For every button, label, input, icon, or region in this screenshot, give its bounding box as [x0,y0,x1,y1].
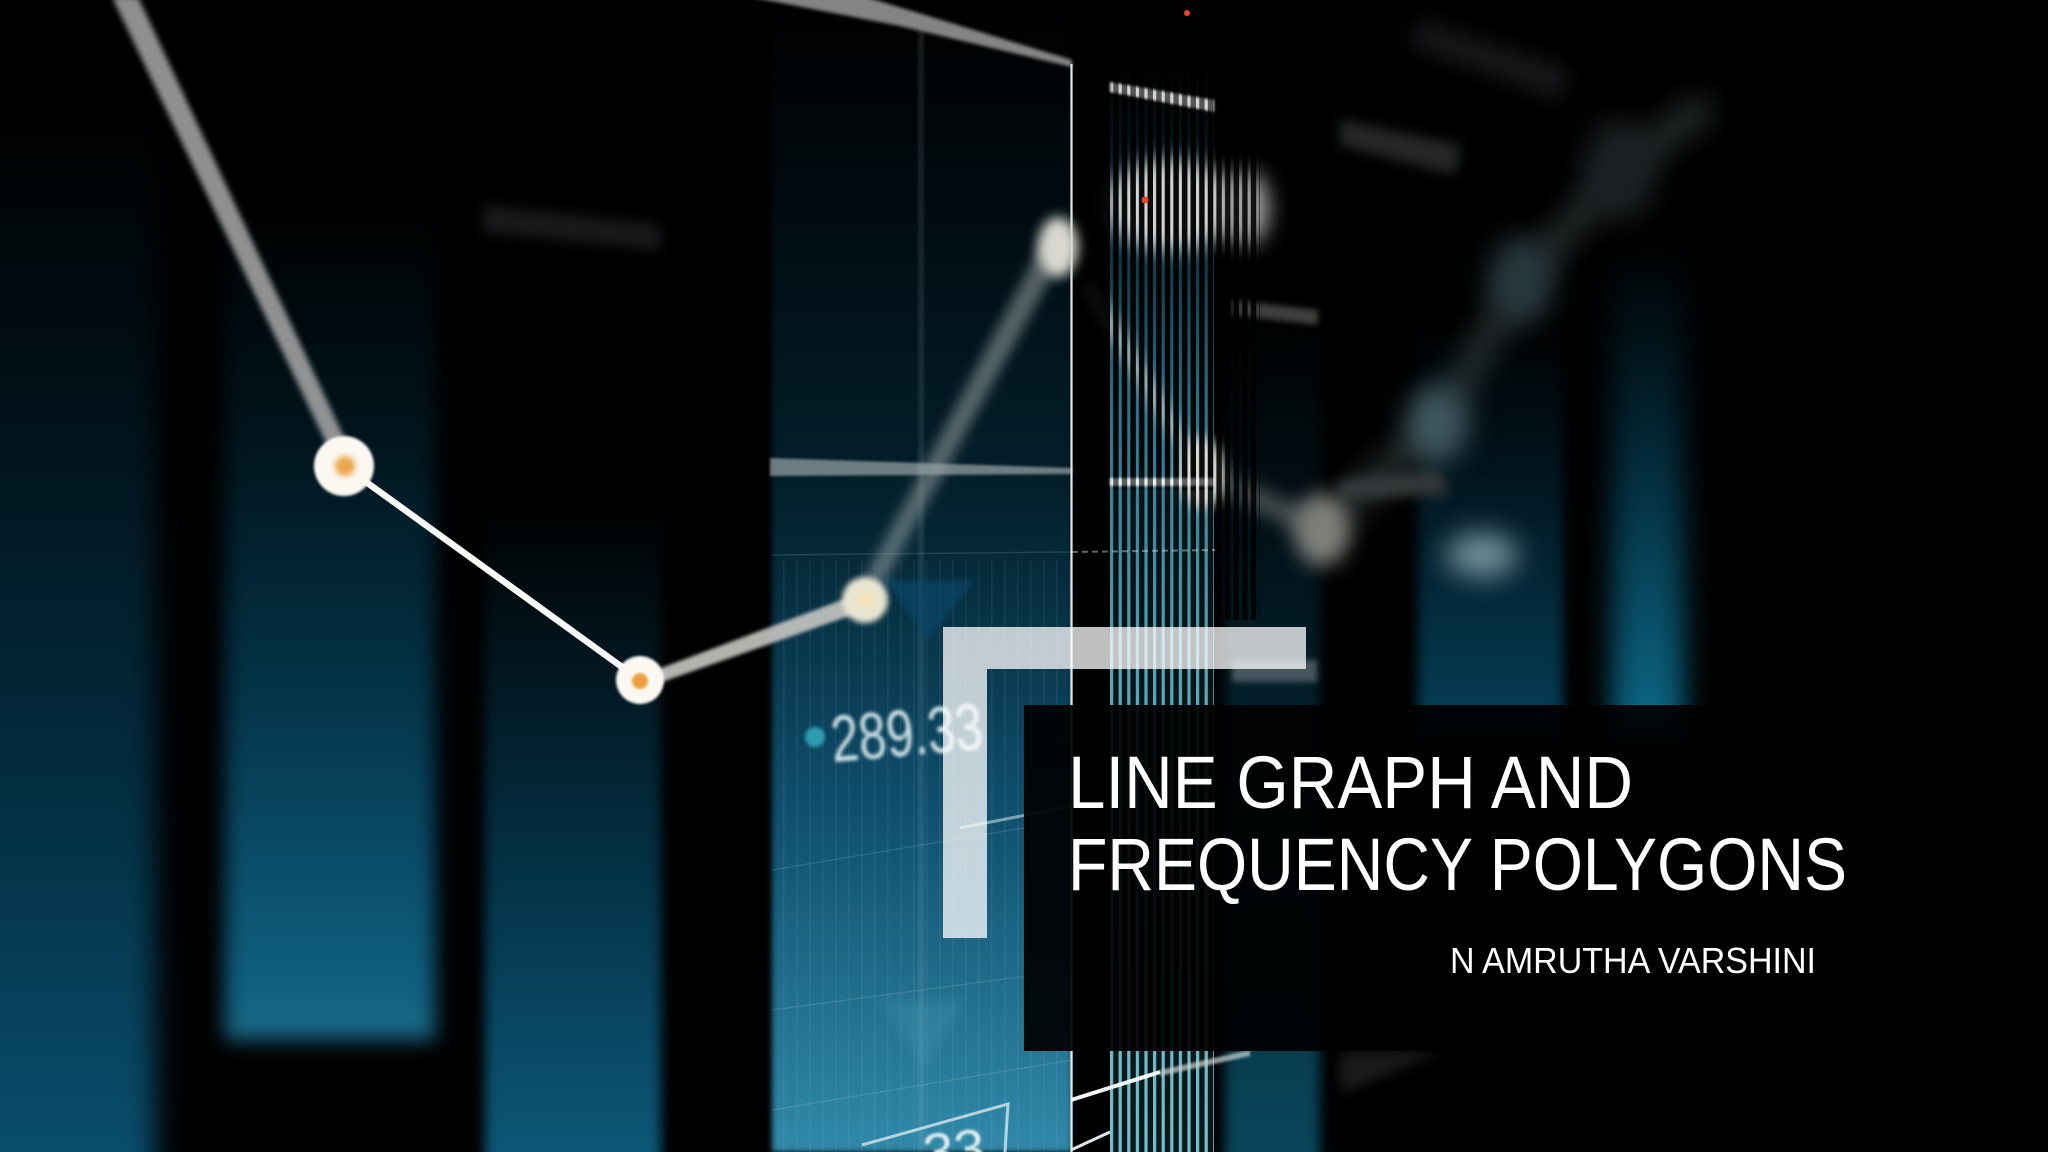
title [1068,741,1847,906]
chart value frame 33 [862,1104,1008,1152]
data point: third marker [842,577,888,623]
chart value 289.33 [805,689,986,776]
stripe overlay [1110,0,1260,1152]
blurred text blob [1104,159,1269,251]
blurred background dashes [483,20,1570,1090]
title: FREQUENCY POLYGONS [1068,823,1847,906]
icon: blue triangles [880,580,975,1070]
line chart: foreground series [112,0,1078,688]
panel grid lines [772,30,1072,1152]
black gap column [1073,0,1110,1152]
striped column [1110,60,1214,1152]
white panel edges [725,0,1250,1152]
title box [1024,705,1728,1051]
data point: first marker [314,436,374,496]
dotted tick rows [1072,82,1215,552]
line chart: far blurred segments [1090,111,1698,566]
chart value 289.33: 289.33 [828,689,986,776]
corner bracket [943,627,1306,938]
data point: second marker [616,656,664,704]
red markers [1142,10,1190,204]
author: N AMRUTHA VARSHINI [1450,940,1816,981]
title: LINE GRAPH AND [1068,741,1633,824]
